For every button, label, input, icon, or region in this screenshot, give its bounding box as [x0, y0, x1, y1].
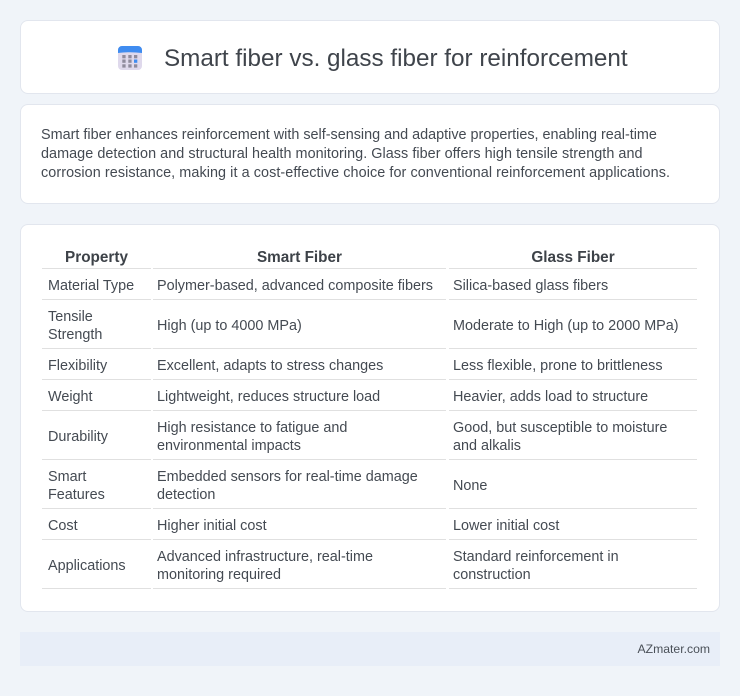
- row: cost: Cost: [48, 518, 78, 534]
- row: tensile strength: Moderate to High (up to 2000 MPa): [453, 318, 679, 334]
- summary text: [41, 127, 670, 181]
- row: smart features: Features: [48, 487, 105, 503]
- row: applications: [48, 549, 619, 583]
- row: durability: [48, 420, 667, 454]
- row: applications: Applications: [48, 558, 126, 574]
- footer credit: AZmater.com: [638, 642, 710, 656]
- summary text: corrosion resistance, making it a cost-effective choice for conventional reinforcement applications.: [41, 165, 670, 181]
- row: smart features: [48, 469, 487, 503]
- row: durability: Durability: [48, 429, 108, 445]
- row: smart features: Smart: [48, 469, 86, 485]
- row: cost: [48, 518, 560, 534]
- row: material type: Material Type: [48, 278, 134, 294]
- header card: [20, 20, 720, 94]
- row: durability: environmental impacts: [157, 438, 301, 454]
- row: durability: Good, but susceptible to moisture: [453, 420, 667, 436]
- row: material type: [48, 278, 608, 294]
- column headers: Glass Fiber: [531, 249, 615, 266]
- column headers: Property: [65, 249, 128, 266]
- row: smart features: None: [453, 478, 487, 494]
- row: tensile strength: Tensile: [48, 309, 93, 325]
- row: applications: Standard reinforcement in: [453, 549, 619, 565]
- row: durability: and alkalis: [453, 438, 521, 454]
- row: material type: Polymer-based, advanced composite fibers: [157, 278, 433, 294]
- row: cost: Lower initial cost: [453, 518, 559, 534]
- comparison table card: [20, 224, 720, 612]
- row: flexibility: Flexibility: [48, 358, 107, 374]
- row: weight: Lightweight, reduces structure load: [157, 389, 380, 405]
- row: applications: Advanced infrastructure, real-time: [157, 549, 373, 565]
- row: material type: Silica-based glass fibers: [453, 278, 608, 294]
- row: tensile strength: [48, 309, 679, 343]
- row: flexibility: Less flexible, prone to brittleness: [453, 358, 663, 374]
- row: flexibility: Excellent, adapts to stress changes: [157, 358, 383, 374]
- row: weight: Heavier, adds load to structure: [453, 389, 648, 405]
- row: smart features: detection: [157, 487, 215, 503]
- row: weight: Weight: [48, 389, 93, 405]
- summary card: [20, 104, 720, 204]
- row: applications: construction: [453, 567, 531, 583]
- summary text: damage detection and structural health monitoring. Glass fiber offers high tensile strength and: [41, 146, 643, 162]
- row: tensile strength: High (up to 4000 MPa): [157, 318, 302, 334]
- icon: calendar: [118, 46, 142, 70]
- row: weight: [48, 389, 648, 405]
- row: applications: monitoring required: [157, 567, 281, 583]
- column headers: [65, 249, 615, 266]
- footer bar: [20, 632, 720, 666]
- row: smart features: Embedded sensors for real-time damage: [157, 469, 418, 485]
- row: durability: High resistance to fatigue and: [157, 420, 347, 436]
- summary text: Smart fiber enhances reinforcement with self-sensing and adaptive properties, enabling real-time: [41, 127, 657, 143]
- title: Smart fiber vs. glass fiber for reinforcement: [164, 45, 628, 72]
- row: flexibility: [48, 358, 663, 374]
- column headers: Smart Fiber: [257, 249, 342, 266]
- row: tensile strength: Strength: [48, 327, 102, 343]
- row: cost: Higher initial cost: [157, 518, 267, 534]
